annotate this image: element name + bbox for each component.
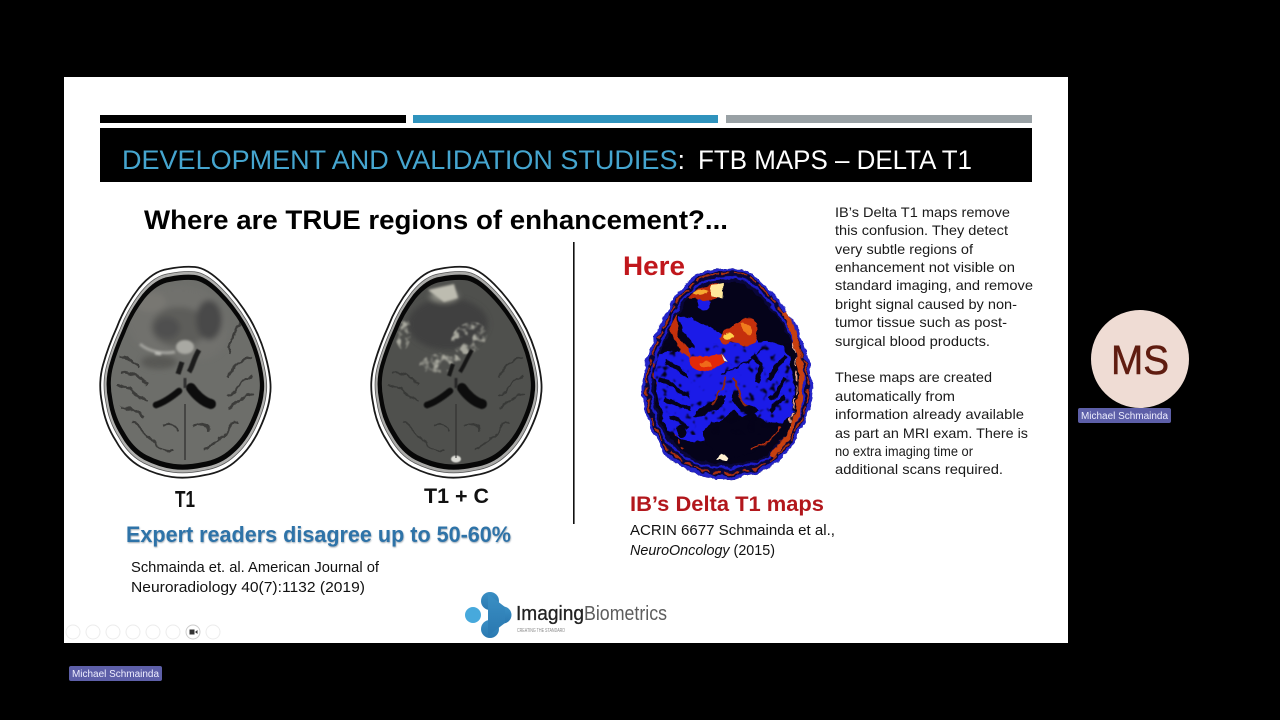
presentation toolbar icons xyxy=(66,625,220,639)
logo: Imaging Biometrics: Imaging xyxy=(516,603,584,625)
logo: Imaging Biometrics: Biometrics xyxy=(584,603,667,625)
label: IB's Delta T1 maps: IB’s Delta T1 maps xyxy=(630,492,824,516)
name tag: speaker xyxy=(1078,408,1171,423)
description text block: no extra imaging time or xyxy=(835,443,973,459)
speaker avatar: MS: MS xyxy=(1111,337,1169,383)
description text block: as part an MRI exam. There is xyxy=(835,425,1028,441)
description text block: These maps are created xyxy=(835,369,992,385)
logo: Imaging Biometrics xyxy=(465,592,667,638)
slide background xyxy=(64,77,1068,643)
citation: ACRIN 6677 xyxy=(630,522,835,559)
brain scan: T1 + C xyxy=(371,267,542,478)
citation: Schmainda AJNR: Neuroradiology 40(7):1132 (2019) xyxy=(131,579,365,596)
description text block xyxy=(835,204,1033,477)
label: T1 + C: T1 + C xyxy=(424,485,489,508)
description text block: surgical blood products. xyxy=(835,333,990,349)
description text block: very subtle regions of xyxy=(835,241,973,257)
name tag: presenter: Michael Schmainda xyxy=(72,669,159,680)
citation: ACRIN 6677: ACRIN 6677 Schmainda et al., xyxy=(630,522,835,539)
brain scan: T1 xyxy=(100,267,271,478)
label: T1: T1 xyxy=(175,486,195,512)
label: Here: Here xyxy=(623,251,685,281)
logo: Imaging Biometrics: CREATING THE STANDARD xyxy=(517,628,565,634)
description text block: bright signal caused by non- xyxy=(835,296,1017,312)
header band: FTB MAPS – DELTA T1 xyxy=(698,145,972,175)
description text block: IB’s Delta T1 maps remove xyxy=(835,204,1010,220)
vertical divider xyxy=(573,242,575,524)
description text block: information already available xyxy=(835,406,1024,422)
header accent bars xyxy=(100,115,1032,123)
citation: ACRIN 6677: NeuroOncology (2015) xyxy=(630,542,775,559)
description text block: tumor tissue such as post- xyxy=(835,314,1007,330)
icon: logo mark xyxy=(465,592,512,638)
citation: Schmainda AJNR xyxy=(131,559,380,596)
description text block: standard imaging, and remove xyxy=(835,277,1033,293)
description text block: additional scans required. xyxy=(835,461,1003,477)
citation: Schmainda AJNR: Schmainda et. al. American Journal of xyxy=(131,559,380,576)
name tag: speaker: Michael Schmainda xyxy=(1081,411,1168,422)
name tag: presenter xyxy=(69,666,162,681)
description text block: enhancement not visible on xyxy=(835,259,1015,275)
header band xyxy=(100,128,1032,182)
speaker avatar: MS xyxy=(1091,310,1189,408)
brain scan: delta T1 map xyxy=(642,268,813,479)
description text block: automatically from xyxy=(835,388,955,404)
description text block: this confusion. They detect xyxy=(835,222,1008,238)
callout: expert readers: Expert readers disagree up to 50-60% xyxy=(126,522,511,547)
heading: Where are TRUE regions of enhancement?... xyxy=(144,205,728,235)
header band: DEVELOPMENT AND VALIDATION STUDIES: xyxy=(122,145,685,175)
